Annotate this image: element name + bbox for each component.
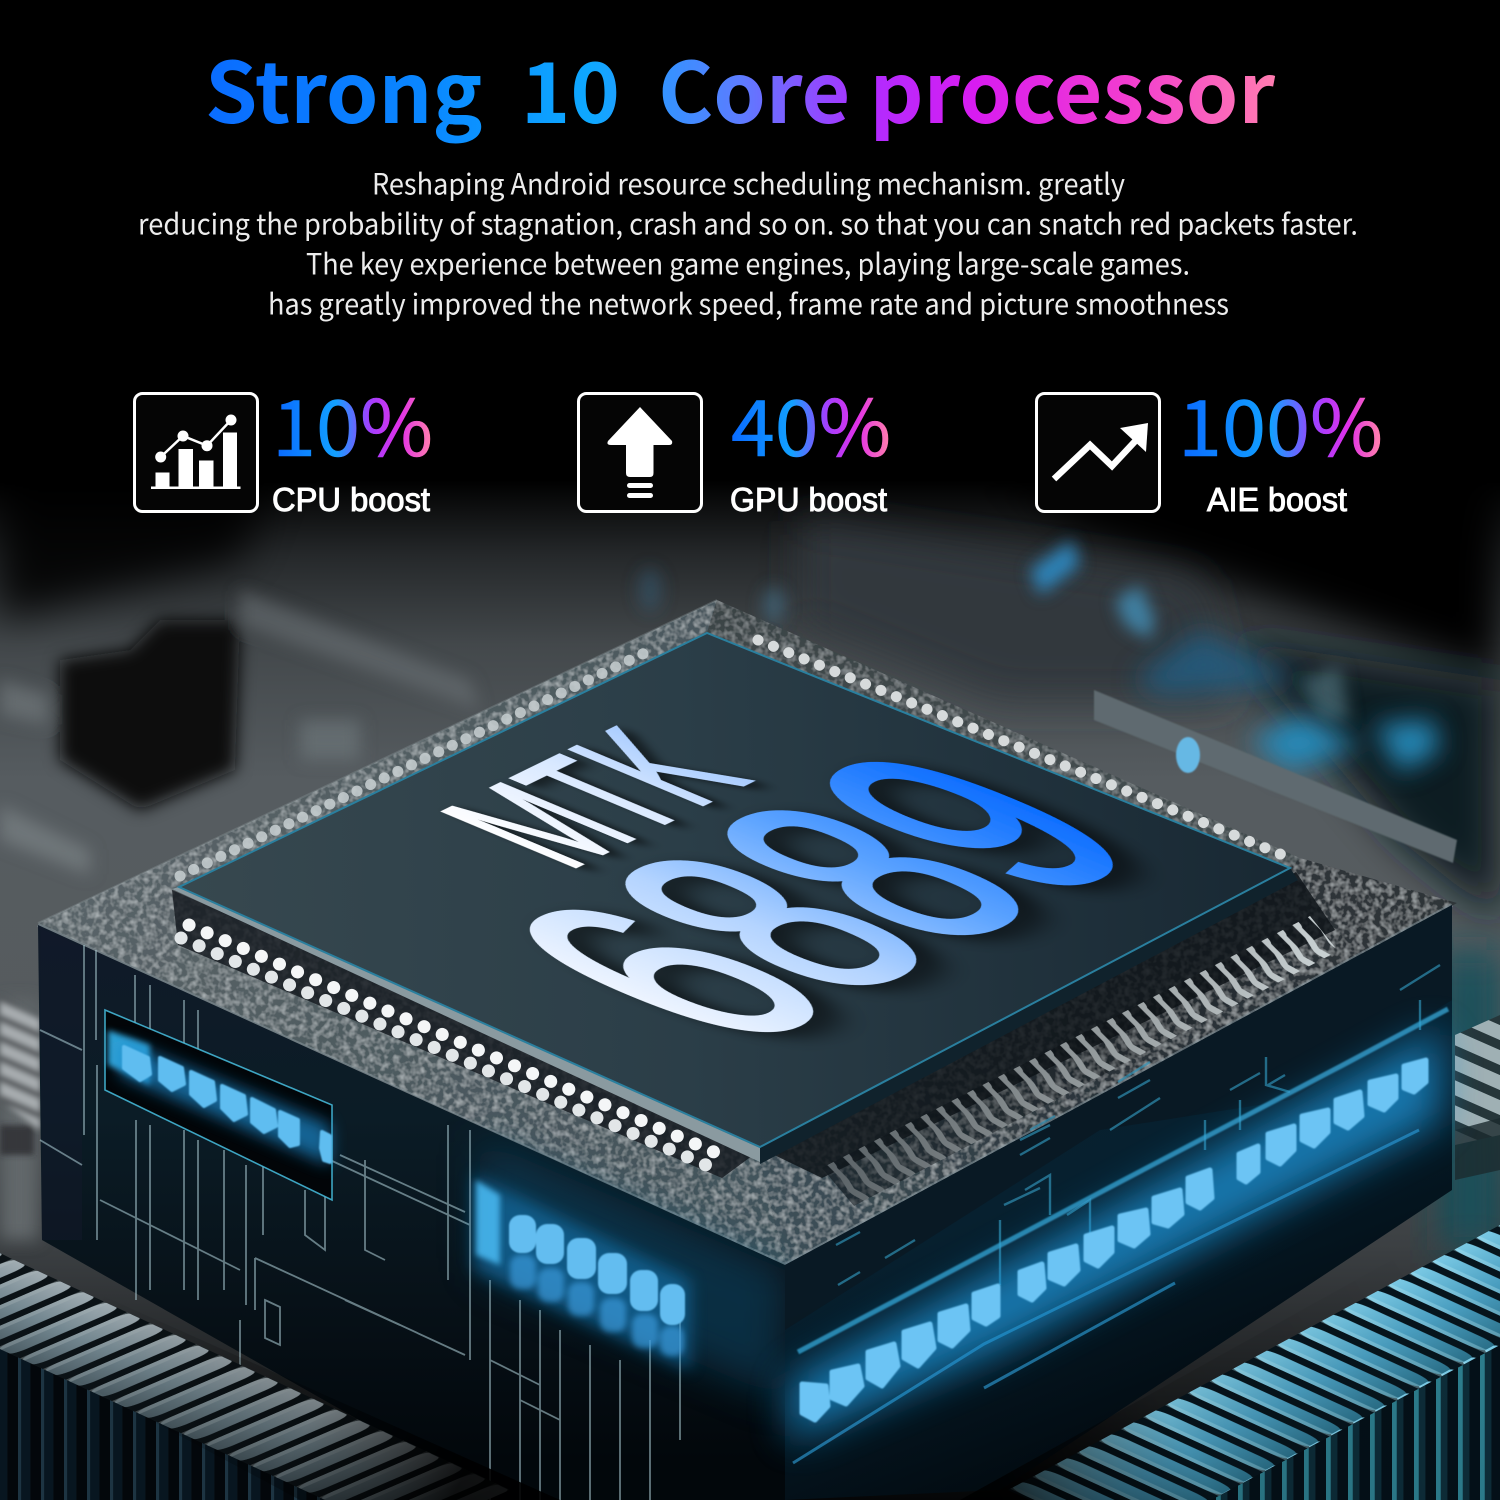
- dark upper-right corner: [900, 400, 1500, 680]
- chip package right face: [785, 905, 1452, 1500]
- LED window: centre: [474, 1175, 690, 1370]
- right face circuit traces: [836, 965, 1440, 1285]
- chip label: MTK: MTK: [393, 707, 795, 888]
- blurred shapes: [0, 540, 1350, 1240]
- icon: up arrow: [578, 394, 702, 512]
- LED strip: right: [802, 1060, 1426, 1420]
- chip front pins: right: [822, 916, 1338, 1206]
- label: GPU boost: GPU boost: [730, 481, 887, 518]
- LED strip lower rail: [793, 1130, 1419, 1463]
- icon: rising trend arrow: [1036, 394, 1160, 512]
- title: Strong 10 Core processor: [205, 27, 1275, 148]
- description text: Reshaping Android resource scheduling mechanism. greatly: [372, 162, 1125, 204]
- label: AIE boost: AIE boost: [1207, 481, 1347, 518]
- left face circuit traces: [40, 945, 680, 1500]
- chip package left face: [38, 925, 785, 1500]
- heatsink pins: bottom left: [0, 1250, 560, 1500]
- label: CPU boost: CPU boost: [272, 481, 430, 518]
- chip package top rim: [38, 600, 1457, 1265]
- value: 100%: 100%: [1178, 367, 1383, 479]
- chip front pins: left: [181, 925, 714, 1165]
- dark channels beside the chip: [172, 890, 760, 1178]
- chip label: 6889: 6889: [415, 713, 1225, 1081]
- value: 10%: 10%: [272, 367, 433, 479]
- LED strip upper rail: [798, 1009, 1448, 1352]
- chip top surface: [172, 633, 1298, 1164]
- blurred blue components: [1135, 630, 1440, 772]
- stat: GPU boost: [578, 367, 891, 518]
- chip back pins: left: [180, 648, 655, 876]
- stat: CPU boost: [134, 367, 433, 518]
- stat: AIE boost: [1036, 367, 1383, 518]
- icon: bar chart with trend line: [134, 394, 258, 512]
- side heatsink right: [1455, 1015, 1500, 1180]
- LED window: left: [105, 1010, 332, 1200]
- heatsink pins: bottom right: [960, 1200, 1500, 1500]
- side heatsink left: [0, 995, 40, 1155]
- description text: The key experience between game engines, playing large-scale games.: [306, 242, 1190, 284]
- LED strip glow: [790, 1030, 1440, 1440]
- description text: has greatly improved the network speed, frame rate and picture smoothness: [268, 282, 1229, 324]
- chip back pins: right: [758, 640, 1290, 858]
- description text: [138, 162, 1358, 324]
- value: 40%: 40%: [731, 367, 891, 479]
- description text: reducing the probability of stagnation, crash and so on. so that you can snatch red packets faster.: [138, 202, 1358, 244]
